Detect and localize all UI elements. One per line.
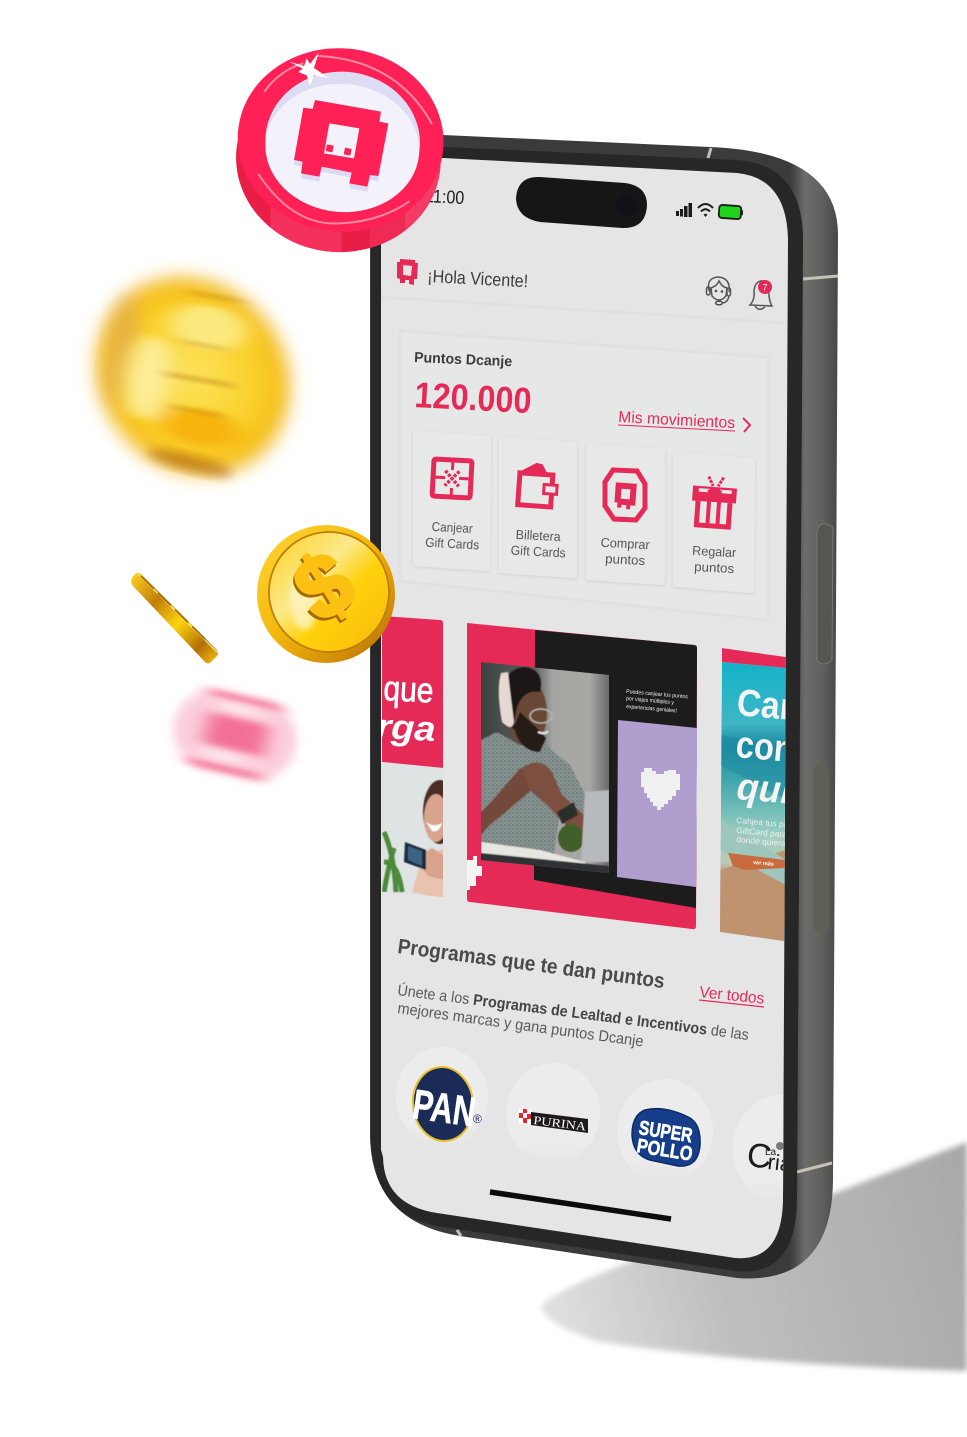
see all link: Ver todos	[699, 984, 765, 1008]
banner: beach right: donde quieras	[736, 834, 790, 849]
tile: regalar: puntos	[694, 559, 735, 576]
tile: regalar: Regalar	[692, 543, 737, 560]
header divider	[788, 322, 789, 324]
brand: Super Pollo	[617, 1079, 713, 1183]
coin logo shadow	[294, 105, 388, 192]
brand logos	[396, 1047, 831, 1203]
icon: wallet	[518, 462, 559, 507]
banner: recarga left	[381, 616, 443, 897]
brand: La Cria: C	[745, 1136, 774, 1177]
tile: regalar	[673, 452, 755, 593]
programs description: Únete a los Programas de Lealtad e Incentivos de las	[396, 982, 750, 1044]
promo caption: por viajes múltiples y	[626, 696, 674, 706]
hands and far arm	[522, 762, 584, 832]
brand: La Cria: ria	[766, 1149, 794, 1177]
tile: comprar	[586, 444, 665, 585]
promo caption	[626, 689, 688, 714]
black panel	[534, 630, 697, 908]
photo: man with headphones	[481, 660, 610, 880]
brand: PAN: ®	[473, 1112, 482, 1126]
shirt	[481, 732, 592, 860]
icon: gift box	[690, 476, 738, 529]
notebook	[481, 842, 585, 868]
panel: puntos	[412, 352, 756, 594]
puzzle piece	[467, 856, 482, 890]
hair	[508, 666, 542, 730]
phone	[370, 135, 838, 1280]
plant	[558, 824, 584, 852]
brand: Purina	[506, 1063, 600, 1163]
home indicator	[490, 1192, 671, 1219]
promo caption: Puedes canjear tus puntos	[626, 689, 688, 700]
coin side	[228, 58, 448, 261]
tile: canjear: Canjear	[431, 519, 474, 536]
head	[508, 689, 548, 745]
tile: canjear	[413, 431, 491, 571]
brand: PAN: PAN	[410, 1080, 479, 1136]
greeting: ¡Hola Vicente!	[427, 266, 529, 291]
bell icon	[750, 280, 772, 309]
side button	[817, 524, 833, 664]
coin: gold dollar: $	[276, 534, 370, 643]
logo window	[324, 123, 359, 158]
laptop	[581, 790, 609, 862]
signal bars	[676, 203, 692, 217]
banner: beach right	[720, 648, 805, 942]
banner: beach right: con	[734, 724, 796, 771]
phone bezel	[371, 147, 803, 1272]
banner: recarga left: rga	[376, 707, 437, 749]
banner: beach right: Cahjea tus puntos	[736, 815, 805, 831]
brand: Purina: PURINA	[533, 1113, 587, 1133]
banner: viajes center	[467, 623, 697, 929]
coin top face	[230, 40, 451, 240]
banner: beach right: Car	[735, 682, 795, 729]
programs description: mejores marcas y gana puntos Dcanje	[396, 1000, 644, 1051]
coin side panels	[271, 140, 443, 260]
floor shadow	[541, 1142, 967, 1371]
phone screen	[381, 158, 788, 1258]
icon: coin	[605, 470, 645, 520]
screen background	[381, 158, 788, 1258]
glasses	[530, 709, 552, 723]
sparkle	[289, 53, 329, 86]
woman photo	[382, 762, 443, 897]
coin: gold dollar	[257, 525, 395, 663]
headphones	[499, 672, 514, 727]
programs heading: Programas que te dan puntos	[396, 935, 666, 993]
coin: thin gold edge-on	[131, 573, 218, 664]
status time: 11:00	[425, 185, 465, 208]
coin inner shadow	[260, 65, 426, 218]
panel title: Puntos Dcanje	[414, 350, 512, 370]
logo eyes	[326, 144, 352, 156]
icon: gift card	[432, 459, 472, 498]
banner: beach right: qui	[735, 766, 794, 813]
watch	[557, 802, 578, 824]
tile: billetera: Billetera	[515, 527, 562, 544]
antenna bands	[457, 148, 838, 1236]
tile: billetera: Gift Cards	[510, 543, 567, 560]
near forearm	[481, 768, 531, 835]
coin: blurred yellow	[56, 237, 330, 515]
brand: La Cria	[733, 1095, 831, 1203]
phone frame	[370, 135, 838, 1278]
tile: comprar: puntos	[605, 551, 646, 568]
tile: billetera	[499, 437, 577, 578]
points value: 120.000	[414, 374, 533, 421]
coin inner face	[260, 78, 425, 218]
support agent icon	[706, 277, 730, 305]
movements link: Mis movimientos	[618, 409, 736, 432]
coin: red logo coin	[228, 40, 451, 261]
table	[481, 853, 609, 880]
promo caption: experiencias geniales!	[626, 704, 678, 714]
coin logo	[294, 100, 388, 187]
app logo small	[397, 259, 418, 285]
banner: recarga left: que	[383, 669, 435, 711]
panel background	[400, 331, 769, 620]
lilac panel	[617, 720, 697, 887]
coin: blurred pink	[166, 682, 304, 788]
brand: PAN	[396, 1047, 488, 1147]
tile: comprar: Comprar	[600, 535, 651, 552]
battery	[719, 205, 743, 219]
dynamic island	[516, 177, 647, 228]
lower side button	[813, 764, 829, 933]
beard	[514, 712, 546, 752]
coin glints	[258, 56, 432, 224]
banner: beach right: GiftCard para	[736, 825, 788, 839]
brand: Super Pollo: SUPER	[637, 1117, 694, 1147]
banner: beach right: ver más	[753, 860, 774, 868]
brand: Super Pollo: POLLO	[635, 1135, 694, 1166]
camera lens	[616, 195, 638, 217]
brand: La Cria: La	[765, 1147, 777, 1158]
coin: gold dollar: $	[277, 531, 371, 641]
bell icon: 7	[762, 282, 768, 292]
tile: canjear: Gift Cards	[425, 535, 480, 552]
wifi icon	[698, 204, 713, 217]
icon: pixel heart	[641, 768, 680, 810]
